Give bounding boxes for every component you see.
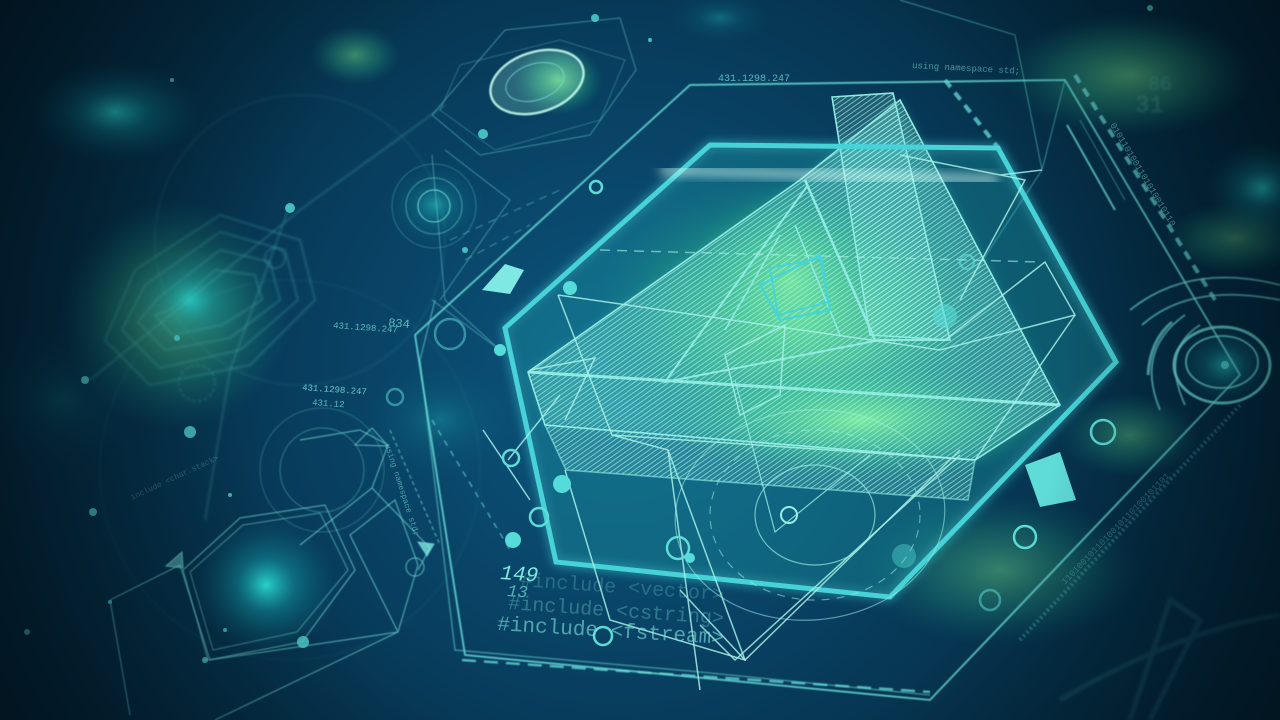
code and number labels: 1101001011010010110100101101 — [1060, 471, 1172, 587]
code and number labels: 0101101001101010010110 — [1107, 121, 1177, 228]
hatched pyramid — [528, 93, 1060, 500]
central glow — [510, 100, 1115, 595]
code and number labels — [129, 61, 1177, 651]
code and number labels: #include <fstream> — [497, 614, 724, 651]
lower left hexagon diagram — [110, 408, 440, 720]
code and number labels: #include <vector> — [520, 570, 725, 607]
code and number labels: 431.1298.247 — [333, 321, 398, 336]
main hexagon outline — [505, 145, 1116, 597]
code and number labels: 834 — [388, 316, 410, 332]
code and number labels: 149 — [500, 563, 539, 589]
code and number labels: #include <cstring> — [508, 593, 725, 631]
code and number labels: 31 — [1135, 93, 1164, 120]
code and number labels: 431.1298.247 — [302, 383, 367, 398]
top left hexagon diagram — [392, 18, 636, 350]
code and number labels: using namespace std; — [912, 61, 1020, 77]
code and number labels: 431.12 — [312, 398, 345, 410]
code and number labels: 13 — [507, 583, 528, 603]
code and number labels: 431.1298.247 — [718, 74, 790, 85]
code and number labels: include <char.stack> — [129, 454, 220, 503]
radar circles — [666, 380, 954, 631]
outer hexagon frame — [415, 0, 1240, 700]
code and number labels: using namespace std; — [382, 443, 420, 537]
right concentric ring gauge — [1130, 278, 1280, 410]
left glowing hexagon diagram — [90, 105, 445, 520]
code and number labels: 86 — [1148, 74, 1172, 97]
inner wireframe — [483, 155, 1075, 690]
